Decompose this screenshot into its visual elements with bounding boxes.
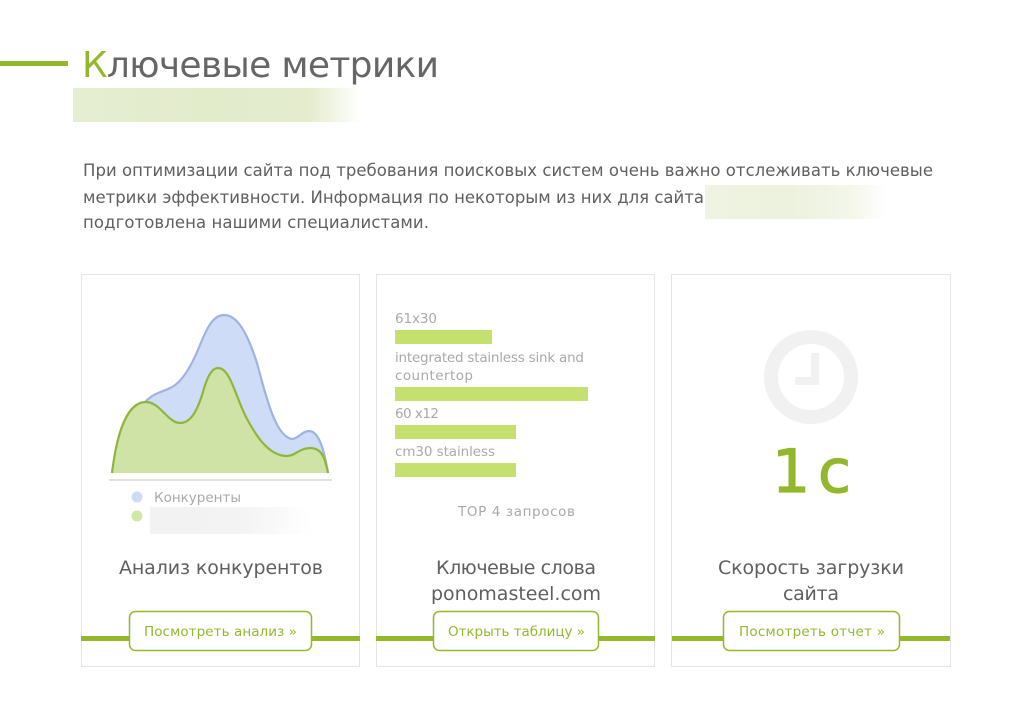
card heading: Анализ конкурентов: [119, 557, 323, 579]
keyword bar chart: countertop: [395, 368, 473, 384]
card rule: [81, 636, 360, 641]
panel: keywords: [376, 274, 655, 666]
card heading: сайта: [783, 583, 839, 605]
keyword bar chart: 60 x12: [395, 406, 439, 422]
keyword bar chart: integrated stainless sink and: [395, 350, 584, 366]
button: [434, 612, 598, 650]
keyword bar chart: cm30 stainless: [395, 444, 495, 460]
own site line: [112, 368, 328, 473]
load time value: 1 с: [772, 437, 851, 507]
card frame: [376, 274, 654, 666]
legend dot: competitors: [132, 492, 142, 502]
card frame: [672, 274, 950, 666]
competitors line: [145, 315, 328, 473]
button: [724, 612, 900, 650]
intro text: [83, 161, 933, 232]
redacted legend label: [150, 507, 312, 534]
redacted subtitle: [73, 88, 361, 122]
button: Посмотреть отчет »: [739, 624, 885, 640]
button: [130, 612, 312, 650]
card heading: [718, 557, 904, 605]
chart caption: TOP 4 запросов: [457, 504, 575, 520]
title: Ключевые метрики: [82, 45, 439, 86]
keyword bar chart: 61x30: [395, 311, 437, 327]
button: Открыть таблицу »: [448, 624, 585, 640]
card heading: Скорость загрузки: [718, 557, 904, 579]
legend: [132, 490, 312, 534]
card frame: [82, 274, 360, 666]
redacted site name: [705, 185, 886, 219]
keyword bar chart: [395, 311, 588, 477]
card heading: [431, 557, 601, 605]
header accent line: [0, 61, 68, 66]
intro text: метрики эффективности. Информация по некоторым из них для сайта: [83, 188, 704, 207]
card rule: [376, 636, 655, 641]
intro text: подготовлена нашими специалистами.: [83, 213, 429, 232]
panel: load speed: [672, 274, 950, 666]
competitors area fill: [112, 315, 328, 473]
intro text: При оптимизации сайта под требования поисковых систем очень важно отслеживать ключевые: [83, 161, 933, 180]
card heading: ponomasteel.com: [431, 583, 601, 605]
legend label: Конкуренты: [154, 490, 241, 506]
icon: clock: [771, 337, 851, 417]
card heading: Ключевые слова: [436, 557, 596, 579]
legend dot: site: [132, 510, 142, 522]
panel: competitor analysis: [81, 274, 360, 666]
card rule: [672, 636, 950, 641]
area chart: [109, 315, 332, 481]
own site area fill: [112, 368, 328, 473]
baseline: [109, 479, 332, 481]
button: Посмотреть анализ »: [144, 624, 297, 640]
